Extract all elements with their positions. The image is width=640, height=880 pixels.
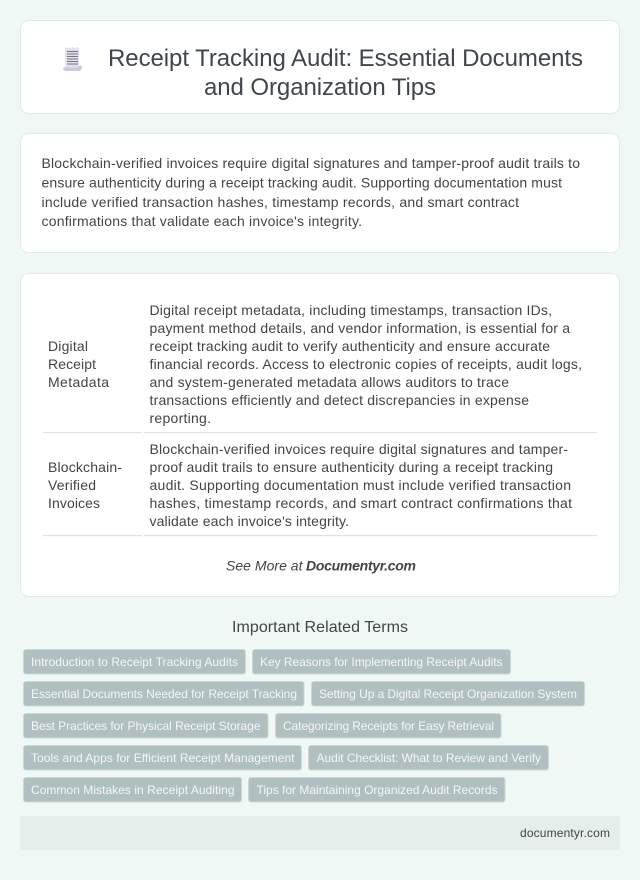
row description: proof audit trails to ensure authenticity during a receipt tracking [150, 459, 553, 475]
row label: Verified [48, 477, 96, 493]
see more link: Documentyr.com [306, 558, 416, 574]
row label: Metadata [48, 374, 109, 390]
tag [24, 650, 246, 674]
tag: Key Reasons for Implementing Receipt Audits [260, 655, 502, 669]
panel: summary paragraph [20, 134, 620, 252]
summary text: Blockchain-verified invoices require digital signatures and tamper-proof audit trails to [42, 155, 580, 171]
row label: Digital [48, 338, 88, 354]
footer bar [20, 816, 620, 850]
row description: audit. Supporting documentation must include verified transaction [150, 477, 571, 493]
table row: blockchain-verified invoices [48, 441, 572, 529]
tag: Common Mistakes in Receipt Auditing [31, 783, 234, 797]
row description: payment method details, and vendor information, is essential for a [150, 320, 570, 336]
footer bar: documentyr.com [520, 826, 610, 840]
row description: validate each invoice's integrity. [150, 513, 349, 529]
row description: and system-generated metadata allows auditors to trace [150, 374, 509, 390]
icon: receipt document [63, 47, 82, 71]
row label [48, 338, 109, 390]
panel: document table [20, 274, 620, 596]
tag: Introduction to Receipt Tracking Audits [31, 655, 238, 669]
tag [248, 778, 505, 802]
panel: title header [20, 20, 620, 114]
tag [24, 746, 302, 770]
tag: Essential Documents Needed for Receipt Tracking [31, 687, 297, 701]
row description: hashes, timestamp records, and smart contract confirmations that [150, 495, 572, 511]
tag [276, 714, 501, 738]
row description [150, 302, 582, 426]
title: Receipt Tracking Audit: Essential Documents [108, 45, 583, 72]
tag [252, 650, 510, 674]
summary text: confirmations that validate each invoice's integrity. [42, 213, 362, 229]
related terms tags [24, 650, 584, 802]
summary text [42, 155, 580, 229]
tag: Tools and Apps for Efficient Receipt Management [31, 751, 295, 765]
tag [24, 778, 242, 802]
table row: digital receipt metadata [48, 302, 582, 426]
title: and Organization Tips [204, 74, 436, 101]
summary text: include verified transaction hashes, timestamp records, and smart contract [42, 194, 519, 210]
row label: Receipt [48, 356, 96, 372]
tag [312, 682, 584, 706]
see more link [226, 558, 416, 574]
tag [308, 746, 548, 770]
row description: receipt tracking audit to verify authenticity and ensure accurate [150, 338, 550, 354]
tag [24, 682, 304, 706]
row description: Blockchain-verified invoices require digital signatures and tamper- [150, 441, 568, 457]
tag: Categorizing Receipts for Easy Retrieval [283, 719, 494, 733]
tag: Setting Up a Digital Receipt Organization System [319, 687, 577, 701]
row description: transactions efficiently and detect discrepancies in expense [150, 392, 529, 408]
tag: Best Practices for Physical Receipt Storage [31, 719, 261, 733]
see more link: See More at [226, 558, 304, 574]
summary text: ensure authenticity during a receipt tracking audit. Supporting documentation must [42, 174, 562, 190]
tag: Audit Checklist: What to Review and Verify [316, 751, 541, 765]
tag [24, 714, 268, 738]
row label [48, 459, 122, 511]
row description: financial records. Access to electronic copies of receipts, audit logs, [150, 356, 582, 372]
title [108, 45, 583, 101]
row label: Blockchain- [48, 459, 122, 475]
heading: important related terms: Important Related Terms [232, 619, 408, 636]
row description: Digital receipt metadata, including timestamps, transaction IDs, [150, 302, 552, 318]
row description [150, 441, 572, 529]
tag: Tips for Maintaining Organized Audit Records [256, 783, 498, 797]
row label: Invoices [48, 495, 100, 511]
row description: reporting. [150, 410, 211, 426]
